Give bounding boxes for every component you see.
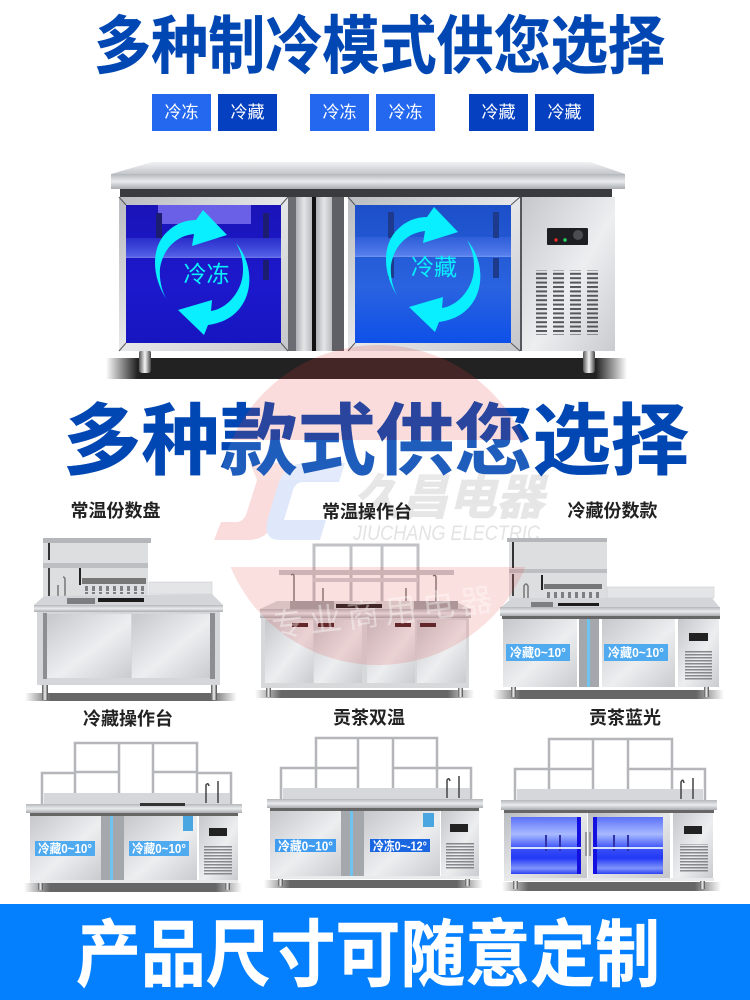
badges bbox=[506, 644, 668, 661]
main refrigerated workbench bbox=[106, 162, 627, 379]
tab: freeze / freeze pair bbox=[310, 94, 435, 131]
watermark logo: JC mark and brand name bbox=[214, 463, 549, 545]
watermark logo: JC mark and brand name: 久昌电器 bbox=[353, 472, 549, 525]
tab: freeze / freeze pair: 冷冻 bbox=[388, 103, 422, 122]
title: product styles: 多种款式供您选择 bbox=[63, 397, 689, 485]
tab: freeze / chill pair bbox=[152, 94, 277, 131]
tab: chill / chill pair: 冷藏 bbox=[548, 103, 582, 122]
label: chill: 冷藏 bbox=[411, 254, 457, 280]
watermark overlay: pink seal circle bbox=[218, 345, 538, 667]
tab: freeze / chill pair: 冷冻 bbox=[164, 103, 198, 122]
unit: room temperature workbench bbox=[255, 545, 474, 698]
badges: 冷藏0~10° bbox=[510, 645, 566, 660]
unit: tea dual temperature bbox=[264, 738, 483, 888]
cycle arrows: chill bbox=[386, 207, 480, 332]
tab: chill / chill pair: 冷藏 bbox=[482, 103, 516, 122]
style headings bbox=[70, 500, 661, 729]
badges: 冷藏0~10° bbox=[278, 838, 333, 854]
mode tabs bbox=[152, 94, 594, 131]
chiller door bbox=[348, 197, 520, 351]
counter top bbox=[111, 162, 625, 197]
unit: chilled workbench bbox=[24, 743, 242, 892]
style headings: 贡茶蓝光 bbox=[589, 708, 661, 728]
bottom banner bbox=[0, 904, 750, 1000]
badges: 冷冻0~-12° bbox=[373, 838, 427, 854]
unit: room temperature portion counter bbox=[25, 538, 237, 701]
label: freeze: 冷冻 bbox=[184, 261, 230, 287]
tab: freeze / freeze pair: 冷冻 bbox=[322, 103, 356, 122]
unit: chilled portion counter bbox=[493, 538, 724, 699]
style headings: 冷藏份数款 bbox=[568, 501, 658, 521]
freezer door bbox=[119, 197, 288, 351]
badges: 冷藏0~10° bbox=[38, 841, 92, 856]
legs bbox=[139, 350, 595, 373]
badges bbox=[275, 838, 430, 854]
compressor panel bbox=[520, 197, 615, 351]
badges: 冷藏0~10° bbox=[132, 841, 186, 856]
vent grilles bbox=[536, 270, 598, 335]
cycle arrows: freeze bbox=[155, 210, 249, 335]
badges: 冷藏0~10° bbox=[608, 645, 664, 660]
unit: tea blue light bbox=[501, 739, 721, 891]
style headings: 冷藏操作台 bbox=[83, 708, 173, 729]
watermark slogan: 专业商用电器 bbox=[270, 581, 494, 644]
watermark logo: JC mark and brand name: JIUCHANG ELECTRIC bbox=[352, 522, 541, 545]
floor shadow bbox=[106, 358, 627, 379]
style headings: 贡茶双温 bbox=[333, 708, 405, 728]
title: cooling modes: 多种制冷模式供您选择 bbox=[94, 12, 665, 82]
banner text: 产品尺寸可随意定制 bbox=[76, 915, 660, 996]
tab: freeze / chill pair: 冷藏 bbox=[230, 103, 264, 122]
control box bbox=[547, 228, 588, 245]
style headings: 常温份数盘 bbox=[70, 500, 160, 521]
centre post bbox=[288, 197, 344, 351]
badges bbox=[35, 841, 189, 856]
style headings: 常温操作台 bbox=[322, 501, 412, 522]
tab: chill / chill pair bbox=[469, 94, 594, 131]
